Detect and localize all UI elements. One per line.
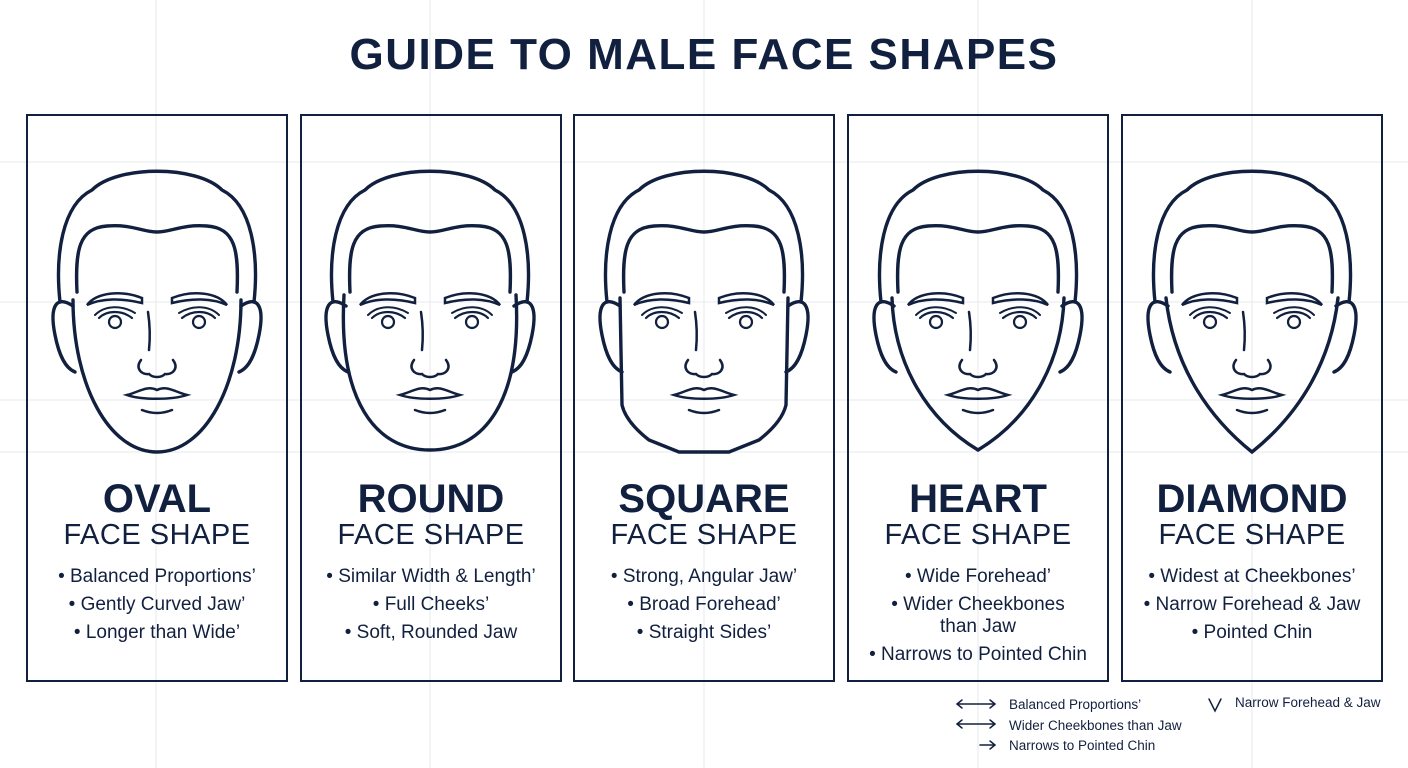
legend: Narrows to Pointed Chin	[1009, 738, 1155, 753]
panel: heart: • Wide Forehead’	[905, 566, 1051, 587]
panel: diamond: • Narrow Forehead & Jaw	[1144, 594, 1360, 615]
panel: round: • Similar Width & Length’	[326, 566, 536, 587]
text: Narrow Forehead & Jaw	[1235, 695, 1381, 710]
panel: oval	[26, 114, 288, 682]
panel: oval: OVAL	[103, 477, 211, 521]
panel: round: FACE SHAPE	[337, 519, 525, 551]
legend arrows	[957, 699, 1221, 749]
panel: round	[300, 114, 562, 682]
panel: square: • Strong, Angular Jaw’	[611, 566, 797, 587]
legend: Balanced Proportions’	[1009, 697, 1141, 712]
panel: diamond	[1121, 114, 1383, 682]
face: diamond	[1148, 171, 1356, 452]
face: square	[600, 171, 808, 452]
panel: heart: FACE SHAPE	[884, 519, 1072, 551]
panel: heart	[847, 114, 1109, 682]
panel: round: ROUND	[358, 477, 504, 521]
panel: oval: • Balanced Proportions’	[58, 566, 256, 587]
panel: square: • Straight Sides’	[637, 622, 771, 643]
face: oval	[53, 171, 261, 452]
legend	[1009, 697, 1182, 753]
panel: square: • Broad Forehead’	[627, 594, 781, 615]
panel: square	[573, 114, 835, 682]
panel: diamond: FACE SHAPE	[1158, 519, 1346, 551]
panel: square: FACE SHAPE	[610, 519, 798, 551]
panel: heart: HEART	[909, 477, 1047, 521]
panel: diamond: • Widest at Cheekbones’	[1148, 566, 1356, 587]
panel: oval: • Gently Curved Jaw’	[69, 594, 245, 615]
panel: oval: FACE SHAPE	[63, 519, 251, 551]
panel: oval: • Longer than Wide’	[74, 622, 240, 643]
panel: heart: than Jaw	[940, 616, 1016, 637]
face: heart	[874, 171, 1082, 450]
panel: round: • Soft, Rounded Jaw	[345, 622, 517, 643]
panel: heart: • Wider Cheekbones	[891, 594, 1065, 615]
face: round	[326, 171, 534, 450]
panel: round: • Full Cheeks’	[373, 594, 489, 615]
panel: diamond: • Pointed Chin	[1192, 622, 1312, 643]
panel: heart: • Narrows to Pointed Chin	[869, 644, 1087, 665]
panel: square: SQUARE	[618, 477, 790, 521]
title: GUIDE TO MALE FACE SHAPES	[350, 30, 1058, 79]
legend: Wider Cheekbones than Jaw	[1009, 718, 1182, 732]
panel: diamond: DIAMOND	[1156, 477, 1348, 521]
